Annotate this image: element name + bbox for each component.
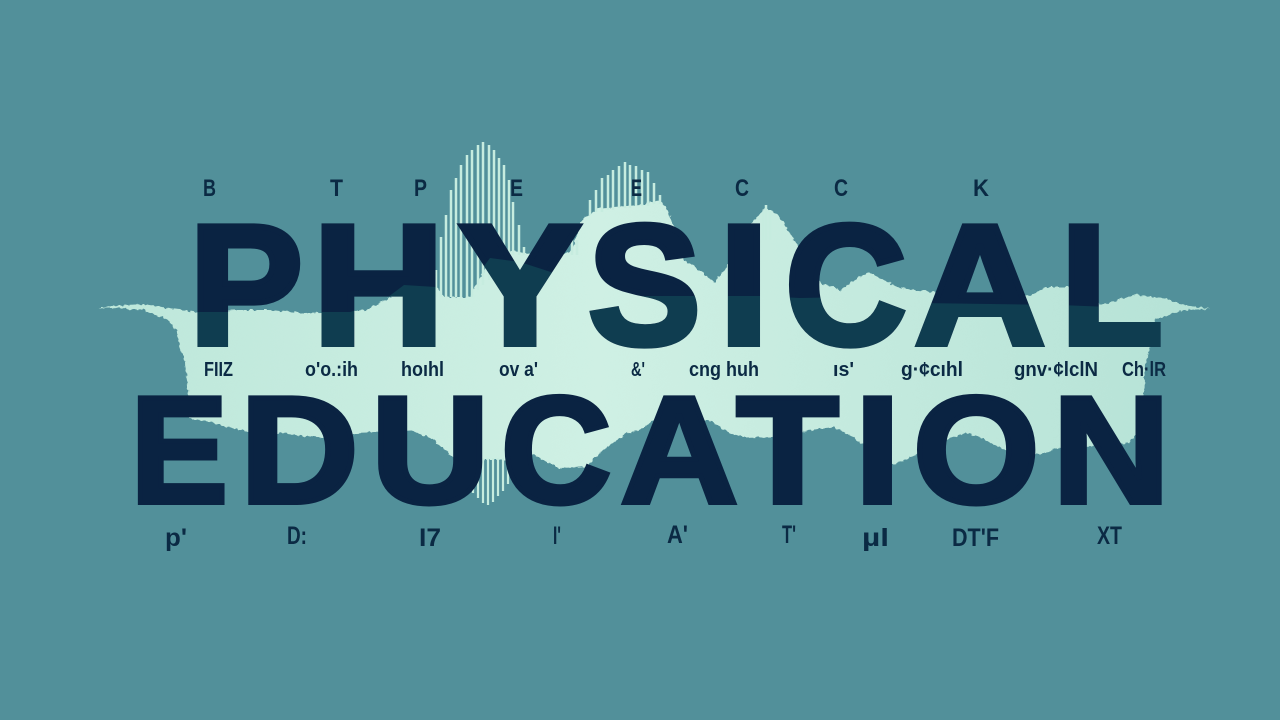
- lighter tone across lower part of PHYSICAL: [186, 258, 1170, 352]
- middle row of small labels: o'o.:ih: [305, 359, 358, 381]
- bottom row of small labels: D:: [287, 522, 307, 550]
- middle row of small labels: g·¢cıhl: [901, 359, 963, 381]
- top row of small labels: P: [414, 175, 427, 202]
- waveform: [99, 142, 1210, 505]
- middle row of small labels: cng huh: [689, 359, 759, 381]
- title line two: EDUCATION: U: [371, 365, 490, 535]
- title line two: EDUCATION: E: [130, 365, 228, 535]
- title line one: PHYSICAL: I: [719, 190, 769, 381]
- title: [130, 189, 1170, 535]
- waveform bars, first peak: [436, 142, 577, 297]
- title line two: EDUCATION: D: [240, 365, 359, 535]
- title line one: PHYSICAL: [189, 189, 1163, 381]
- title line one: PHYSICAL: L: [1060, 189, 1163, 380]
- bottom row of small labels: µl: [862, 524, 889, 552]
- title line one: PHYSICAL: C: [785, 189, 907, 380]
- title line one: PHYSICAL: P: [189, 190, 303, 381]
- middle row of small labels: gnv·¢lclN: [1014, 359, 1098, 381]
- top row of small labels: E: [631, 175, 642, 202]
- top row of small labels: C: [834, 175, 848, 202]
- bottom row of small labels: T': [782, 521, 796, 549]
- middle row of small labels: ov a': [499, 359, 538, 381]
- top row of small labels: E: [510, 175, 523, 202]
- top row of small labels: T: [330, 175, 343, 202]
- title line one: PHYSICAL: Y: [459, 189, 581, 381]
- title line two: EDUCATION: I: [855, 366, 900, 535]
- middle row of small labels: hoıhl: [401, 359, 444, 381]
- top row of small labels: [203, 175, 990, 202]
- bottom row of small labels: I': [553, 522, 561, 550]
- title line one: PHYSICAL: A: [914, 190, 1045, 381]
- top row of small labels: K: [973, 175, 990, 202]
- middle row of small labels: FIIZ: [204, 359, 233, 381]
- title line two: EDUCATION: N: [1052, 366, 1170, 535]
- top row of small labels: B: [203, 175, 216, 202]
- middle row of small labels: &': [631, 359, 645, 381]
- title line one: PHYSICAL: H: [312, 189, 445, 381]
- waveform bars, lower peak: [473, 458, 508, 505]
- bottom row of small labels: [165, 521, 1122, 552]
- middle row of small labels: ıs': [833, 359, 854, 381]
- bottom row of small labels: DT'F: [952, 524, 999, 552]
- title line two: EDUCATION: C: [501, 366, 611, 535]
- title line two: EDUCATION: O: [913, 366, 1040, 535]
- top row of small labels: C: [735, 175, 749, 202]
- title line one: PHYSICAL: S: [588, 190, 701, 381]
- title line two: EDUCATION: [130, 365, 1170, 535]
- waveform bars, second peak: [590, 162, 770, 250]
- bottom row of small labels: A': [667, 521, 688, 549]
- middle row of small labels: Ch·lR: [1122, 359, 1166, 381]
- middle row of small labels: [204, 359, 1166, 381]
- bottom row of small labels: p': [165, 524, 187, 552]
- bottom row of small labels: I7: [419, 524, 441, 552]
- title line two: EDUCATION: T: [736, 365, 839, 535]
- bottom row of small labels: XT: [1097, 522, 1122, 550]
- title line two: EDUCATION: A: [620, 366, 738, 535]
- waveform solid body: [99, 200, 1210, 470]
